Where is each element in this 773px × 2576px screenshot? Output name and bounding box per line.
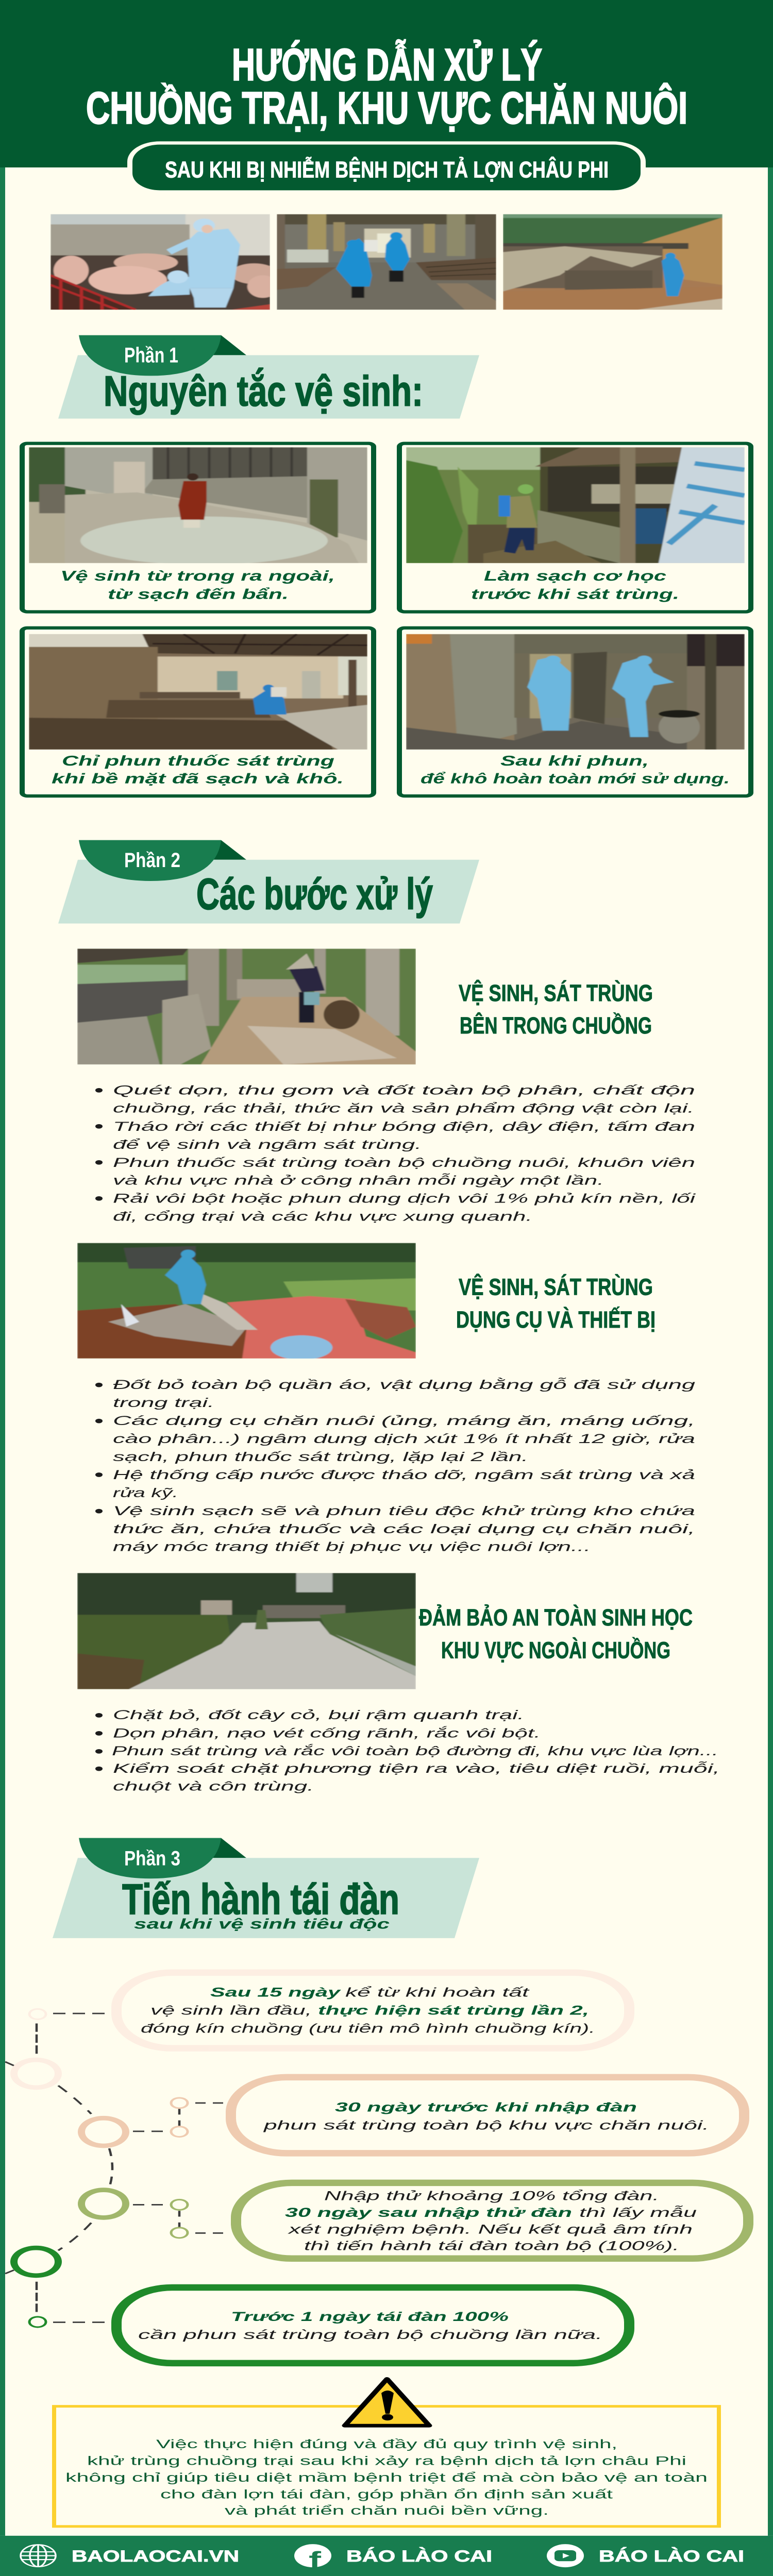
photo: worker spreading lime in stable aisle	[77, 948, 416, 1064]
bullet list: outside the pen: Chặt bỏ, đốt cây cỏ, bụi rậm quanh trại.	[113, 1708, 524, 1722]
heading: tools and equipment	[456, 1274, 656, 1333]
bullet list: tools and equipment: Hệ thống cấp nước được tháo dỡ, ngâm sát trùng và xả	[113, 1468, 695, 1482]
photo: worker spraying outside shed	[503, 214, 722, 310]
section 3 heading: Tiến hành tái đàn	[122, 1875, 399, 1923]
bullet list: inside the pen: chuồng, rác thải, thức ăn và sản phẩm động vật còn lại.	[113, 1101, 694, 1115]
caption: trước khi sát trùng.	[471, 586, 679, 602]
photo: woman on washed path	[29, 447, 367, 564]
icon: globe	[21, 2545, 56, 2567]
section 2 heading	[58, 840, 479, 923]
bullet list: outside the pen: chuột và côn trùng.	[113, 1780, 314, 1794]
pill: step 4	[116, 2287, 629, 2363]
bullet list: tools and equipment: sạch, phun thuốc sát trùng, lặp lại 2 lần.	[113, 1450, 528, 1464]
photo: two workers spraying in hall	[277, 214, 496, 310]
caption: khi bề mặt đã sạch và khô.	[52, 771, 344, 787]
bullet list: tools and equipment: trong trại.	[113, 1396, 214, 1410]
bullet list: tools and equipment: thức ăn, chứa thuốc và các loại dụng cụ chăn nuôi,	[113, 1522, 695, 1536]
pill: step 1: vệ sinh lần đầu,	[150, 2004, 312, 2018]
subtitle pill	[130, 143, 643, 192]
bullet list: inside the pen: Tháo rời các thiết bị như bóng điện, dây điện, tấm đan	[113, 1120, 695, 1134]
pill: step 2	[231, 2077, 744, 2153]
photo: worker spraying burial pit	[77, 1243, 416, 1359]
panel: card 4	[399, 628, 751, 796]
footer facebook name: BÁO LÀO CAI	[346, 2547, 492, 2565]
panel: card 1	[22, 444, 374, 612]
heading: outside the pen	[419, 1604, 693, 1663]
footer	[0, 2536, 773, 2576]
caption: để khô hoàn toàn mới sử dụng.	[421, 771, 730, 787]
icon: facebook: f	[309, 2547, 322, 2573]
heading: inside the pen	[459, 980, 653, 1039]
bullet list: inside the pen: Phun thuốc sát trùng toàn bộ chuồng nuôi, khuôn viên	[113, 1156, 695, 1170]
pill: step 3: 30 ngày sau nhập thử đàn	[285, 2206, 572, 2220]
photo: lime spread on road	[77, 1573, 416, 1689]
footer youtube name: BÁO LÀO CAI	[599, 2547, 744, 2565]
title	[86, 39, 687, 133]
caption: Làm sạch cơ học	[484, 568, 666, 584]
pill: step 1: kể từ khi hoàn tất	[345, 1986, 530, 2000]
timeline nodes	[14, 2009, 188, 2327]
pill: step 3: xét nghiệm bệnh. Nếu kết quả âm tính	[287, 2223, 693, 2237]
caption	[471, 568, 679, 602]
pill: step 1: Sau 15 ngày	[210, 1986, 341, 2000]
pill: step 4: cần phun sát trùng toàn bộ chuồng lần nữa.	[138, 2328, 602, 2342]
bullet list: tools and equipment: máy móc trang thiết bị phục vụ việc nuôi lợn...	[113, 1540, 591, 1554]
bullet list: tools and equipment: Các dụng cụ chăn nuôi (ủng, máng ăn, máng uống,	[113, 1414, 695, 1428]
callout: conclusion box	[54, 2406, 719, 2527]
panel: card 3	[22, 628, 374, 796]
caption: Vệ sinh từ trong ra ngoài,	[60, 568, 335, 584]
photo: two workers in dried stable	[406, 634, 745, 750]
pill: step 1	[116, 1973, 629, 2048]
pill: step 3: Nhập thử khoảng 10% tổng đàn.	[324, 2189, 659, 2204]
section 1 badge: Phần 1	[124, 343, 178, 367]
icon: warning triangle	[345, 2379, 429, 2426]
photo: barn interior spraying	[29, 634, 367, 750]
callout: conclusion box: không chỉ giúp tiêu diệt mầm bệnh triệt để mà còn bảo vệ an toàn	[65, 2470, 708, 2484]
caption: Chỉ phun thuốc sát trùng	[62, 753, 334, 769]
bullet list: inside the pen	[95, 1083, 696, 1224]
bullet list: tools and equipment: Đốt bỏ toàn bộ quần áo, vật dụng bằng gỗ đã sử dụng	[113, 1378, 696, 1392]
section 3 badge: Phần 3	[124, 1847, 180, 1870]
callout: conclusion box: khử trùng chuồng trại sau khi xảy ra bệnh dịch tả lợn châu Phi	[87, 2454, 686, 2468]
bullet list: outside the pen: Dọn phân, nạo vét cống rãnh, rắc vôi bột.	[113, 1726, 541, 1740]
photo: man spraying by shed	[406, 447, 745, 564]
bullet list: inside the pen: để vệ sinh và ngâm sát trùng.	[113, 1138, 422, 1152]
callout: conclusion box: và phát triển chăn nuôi bền vững.	[225, 2504, 549, 2517]
timeline connector	[5, 2013, 227, 2323]
bullet list: tools and equipment: cào phân...) ngâm dung dịch xút 1% ít nhất 12 giờ, rửa	[113, 1432, 695, 1446]
caption: từ sạch đến bẩn.	[108, 586, 289, 602]
bullet list: tools and equipment: Vệ sinh sạch sẽ và phun tiêu độc khử trùng kho chứa	[113, 1504, 695, 1518]
caption	[52, 753, 344, 787]
section 3 subtitle: sau khi vệ sinh tiêu độc	[134, 1916, 390, 1932]
section 1 heading: Nguyên tắc vệ sinh:	[104, 367, 423, 415]
bullet list: outside the pen: Kiểm soát chặt phương tiện ra vào, tiêu diệt ruồi, muỗi,	[113, 1762, 720, 1776]
section 1 badge	[79, 335, 221, 376]
icon: youtube	[547, 2544, 584, 2567]
section 2 badge	[79, 840, 221, 881]
section 2 heading: Các bước xử lý	[196, 870, 433, 919]
caption: Sau khi phun,	[500, 753, 649, 769]
bullet list: inside the pen: và khu vực nhà ở công nhân mỗi ngày một lần.	[113, 1174, 604, 1188]
bullet list: inside the pen: Rải vôi bột hoặc phun dung dịch vôi 1% phủ kín nền, lối	[113, 1192, 696, 1206]
pill: step 3: thì tiến hành tái đàn toàn bộ (100%).	[304, 2239, 679, 2253]
pill: step 3: thì lấy mẫu	[579, 2206, 697, 2220]
caption	[421, 753, 730, 787]
section 1 heading	[58, 335, 479, 418]
panel: card 2	[399, 444, 751, 612]
section 2 badge: Phần 2	[124, 849, 180, 872]
bullet list: inside the pen: Quét dọn, thu gom và đốt toàn bộ phân, chất độn	[113, 1083, 695, 1097]
callout: conclusion box: Việc thực hiện đúng và đầy đủ quy trình vệ sinh,	[156, 2437, 617, 2451]
bullet list: tools and equipment: rửa kỹ.	[113, 1486, 178, 1500]
bullet list: inside the pen: đi, cổng trại và các khu vực xung quanh.	[113, 1210, 532, 1224]
icon: facebook	[294, 2544, 331, 2573]
pill: step 1: thực hiện sát trùng lần 2,	[318, 2004, 589, 2018]
bullet list: tools and equipment	[95, 1378, 696, 1554]
section 3 heading	[53, 1838, 479, 1938]
photo: pig inspection	[51, 214, 270, 310]
pill: step 2: 30 ngày trước khi nhập đàn	[335, 2100, 637, 2115]
header band with title	[0, 0, 773, 167]
footer website: BAOLAOCAI.VN	[72, 2547, 239, 2565]
bullet list: outside the pen	[95, 1708, 720, 1794]
bullet list: outside the pen: Phun sát trùng và rắc vôi toàn bộ đường đi, khu vực lùa lợn...	[112, 1744, 718, 1758]
section 3 badge	[79, 1838, 221, 1878]
pill: step 4: Trước 1 ngày tái đàn 100%	[231, 2310, 509, 2324]
caption	[60, 568, 335, 602]
pill: step 2: phun sát trùng toàn bộ khu vực chăn nuôi.	[263, 2119, 709, 2133]
callout: conclusion box: cho đàn lợn tái đàn, góp phần ổn định sản xuất	[160, 2487, 613, 2501]
pill: step 1: đóng kín chuồng (ưu tiên mô hình chuồng kín).	[141, 2022, 595, 2036]
pill: step 3	[236, 2183, 748, 2259]
